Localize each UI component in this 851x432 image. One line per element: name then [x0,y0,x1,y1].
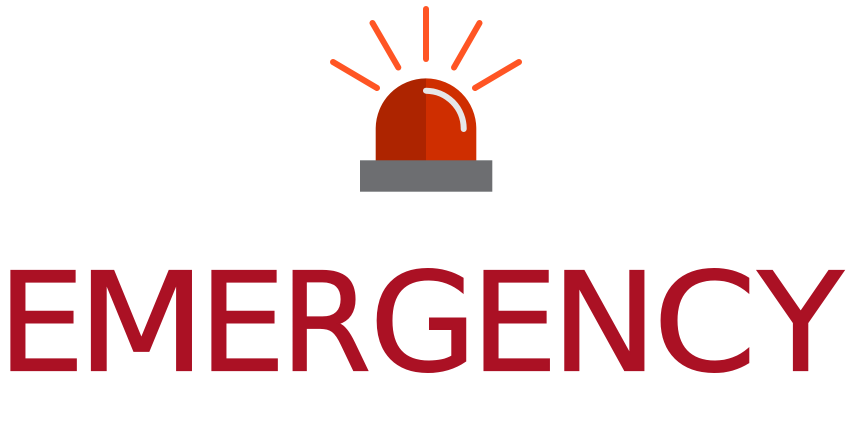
title: E [198,244,286,403]
icon: siren dome [376,78,476,160]
title: E [0,244,85,403]
icon: emergency siren [333,9,519,192]
title: Y [757,244,844,403]
title: G [370,244,477,403]
icon: siren base [360,160,492,192]
title: R [280,244,371,403]
title: N [551,244,658,403]
title: E [471,244,558,403]
icon: light rays [333,9,519,88]
title: M [77,244,206,403]
title: C [653,244,757,403]
